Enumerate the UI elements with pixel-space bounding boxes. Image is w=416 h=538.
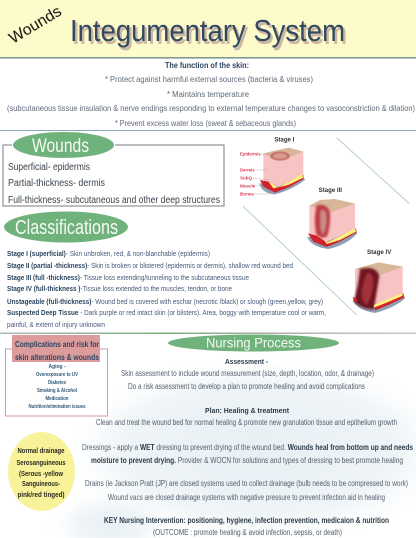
wound depth list: Partial-thickness- dermis — [8, 178, 105, 189]
risk factors: Nutrition/elimination issues — [28, 404, 86, 410]
wound depth list: Superficial- epidermis — [8, 162, 90, 173]
callout: normal drainage: pink/red tinged) — [18, 492, 64, 499]
classifications pill: Classifications — [15, 217, 118, 239]
callout: normal drainage: (Serous -yellow — [19, 471, 63, 478]
callout: normal drainage: Serosanguineous — [16, 460, 66, 467]
risk factors: Overexposure to UV — [36, 372, 78, 378]
classification list: Unstageable (full-thickness)- Wound bed is covered with eschar (necrotic /black) or slough (green,yellow, grey) — [7, 297, 323, 306]
background wash — [55, 355, 416, 538]
classification list: Stage II (partial -thickness)- Skin is broken or blistered (epidermis or dermis), shallow red wound bed — [7, 261, 293, 270]
risk factors: Medication — [46, 396, 69, 402]
stage 4 — [353, 249, 405, 313]
nursing process pill: Nursing Process — [206, 336, 301, 350]
classification list: Stage III (full -thickness)- Tissue loss extending/tunneling to the subcutaneous tissue — [7, 273, 249, 282]
risk factors: Smoking & Alcohol — [37, 388, 77, 394]
stage 3 — [307, 187, 357, 249]
nursing process text — [82, 357, 413, 537]
complications header: Complications and risk for — [15, 340, 99, 349]
stage 1: Bones — [240, 192, 254, 197]
stage 1: Muscle — [240, 184, 256, 189]
classification list: painful, & extent of injury unknown — [7, 320, 105, 329]
risk factors: Aging - — [48, 364, 66, 370]
wound depth list — [8, 162, 220, 206]
title: Integumentary System — [70, 13, 345, 48]
title: Integumentary System — [72, 16, 347, 50]
classification list: Suspected Deep Tissue - Dark purple or red intact skin (or blisters). Area, boggy with temperature cool or warm, — [7, 308, 326, 317]
stage 1: Dermis — [240, 168, 255, 173]
skin function text: * Protect against harmful external sources (bacteria & viruses) — [105, 74, 313, 84]
risk factors: Diabetes — [48, 380, 66, 386]
stage 1 — [240, 137, 305, 197]
wounds pill: Wounds — [32, 136, 89, 157]
wounds pill — [13, 132, 114, 158]
stage 3: Stage III — [319, 187, 342, 194]
skin function text — [7, 60, 415, 128]
panel: wounds — [3, 132, 224, 206]
complications header — [12, 335, 100, 362]
stage 1: Stage I — [274, 137, 294, 144]
nursing process pill — [168, 334, 339, 352]
risk factors — [28, 364, 86, 410]
wound depth list: Full-thickness- subcutaneous and other deep structures — [8, 195, 220, 206]
skin function text: * Prevent excess water loss (sweat & sebaceous glands) — [115, 118, 296, 128]
wounds tag: Wounds — [6, 3, 65, 47]
heading: skin function: The function of the skin: — [165, 60, 249, 70]
nursing process text: (OUTCOME : promote healing & avoid infection, sepsis, or death) — [153, 528, 342, 537]
classifications pill — [4, 212, 128, 242]
classification list: Stage I (superficial)- Skin unbroken, red, & non-blanchable (epidermis) — [7, 249, 210, 258]
callout: normal drainage: Normal drainage — [18, 448, 65, 455]
nursing process text: Assessment - — [225, 357, 268, 366]
callout: normal drainage — [8, 432, 75, 511]
panel: complications — [6, 335, 108, 416]
callout: normal drainage: Sanguineous- — [22, 481, 61, 488]
stage illustrations — [240, 137, 405, 313]
stage 4: Stage IV — [367, 249, 392, 256]
header banner — [0, 0, 416, 59]
nursing process text: Do a risk assessment to develop a plan to promote healing and avoid complications — [128, 382, 365, 391]
diagonal divider lines — [243, 138, 409, 315]
nursing process text: Plan: Healing & treatment — [205, 406, 289, 415]
classification list: Stage IV (full-thickness )-Tissue loss extended to the muscles, tendon, or bone — [7, 284, 232, 293]
skin function text: * Maintains temperature — [167, 89, 249, 99]
complications header: skin alterations & wounds — [15, 353, 99, 362]
classification list — [7, 249, 326, 329]
stage 1: SubQ — [240, 176, 252, 181]
stage 1: Epidermis — [240, 152, 261, 157]
